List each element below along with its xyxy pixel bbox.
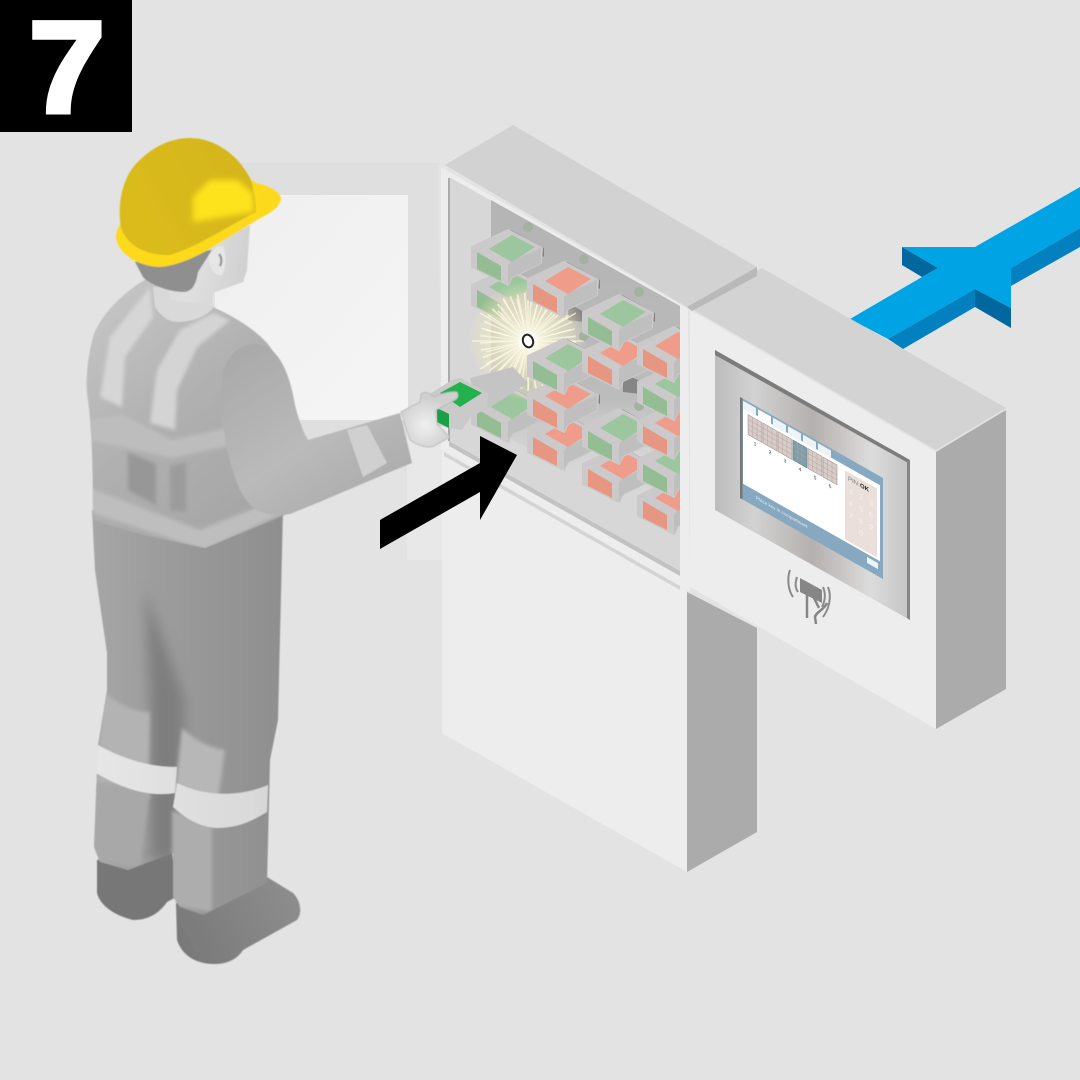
touchscreen display: PIN: xyxy=(848,475,860,489)
key modules xyxy=(471,222,680,535)
ear xyxy=(209,246,226,275)
touchscreen bezel xyxy=(715,350,910,620)
touchscreen display: 1 xyxy=(754,441,756,448)
worker xyxy=(85,138,458,964)
touchscreen display: 5 xyxy=(814,475,816,482)
touchscreen display: 2 xyxy=(769,449,771,457)
cabinet interior xyxy=(449,177,680,571)
helmet brim xyxy=(116,180,281,267)
right control cabinet xyxy=(690,268,1006,729)
sleeve reflective band xyxy=(347,425,387,477)
left locker cabinet xyxy=(441,125,757,592)
lower cabinet pedestal xyxy=(442,450,757,872)
hair xyxy=(135,250,212,292)
light burst xyxy=(472,284,584,397)
pulled out green key xyxy=(428,367,528,430)
helmet xyxy=(116,138,281,267)
dark recesses xyxy=(568,303,640,394)
helmet highlight xyxy=(193,180,254,222)
column three modules xyxy=(583,287,655,502)
touchscreen display: 3 xyxy=(784,458,786,465)
face xyxy=(170,225,250,305)
blue pipe xyxy=(850,187,1080,349)
open cabinet door xyxy=(215,163,442,560)
touchscreen display: 4 xyxy=(849,498,853,509)
step number badge xyxy=(0,0,132,140)
touchscreen display: 3 xyxy=(869,498,873,508)
left lower leg light xyxy=(98,696,152,783)
touchscreen display: OK xyxy=(860,482,869,494)
touchscreen display: Place key in compartment xyxy=(756,495,808,530)
knee band left xyxy=(96,745,177,794)
touchscreen display: 9 xyxy=(869,522,873,532)
cabinet top xyxy=(445,125,757,307)
touchscreen display: 5 xyxy=(859,504,863,514)
column one modules xyxy=(472,222,544,442)
touchscreen display: 1 xyxy=(849,486,853,497)
touchscreen display: 6 xyxy=(869,510,873,520)
cabinet frame xyxy=(441,167,690,592)
leg shading crease xyxy=(145,590,185,860)
touchscreen display xyxy=(740,397,883,579)
helmet dome xyxy=(120,138,256,255)
column two modules xyxy=(528,254,600,470)
touchscreen display: 0 xyxy=(859,528,863,538)
knee band right xyxy=(173,783,268,828)
touchscreen display: 8 xyxy=(859,516,863,526)
indicator ring xyxy=(521,333,535,349)
touchscreen display: 6 xyxy=(829,483,831,491)
right lower leg light xyxy=(175,728,225,800)
trousers xyxy=(85,505,290,920)
boots xyxy=(97,850,300,964)
torso xyxy=(87,277,297,548)
touchscreen display: 7 xyxy=(849,510,853,521)
touchscreen display: 2 xyxy=(859,492,863,502)
icon: contactless card reader xyxy=(788,570,830,624)
neck xyxy=(153,285,213,322)
touchscreen display: 4 xyxy=(799,466,801,474)
right arm xyxy=(222,344,412,515)
hand xyxy=(401,392,458,447)
arrow pointing to key slot xyxy=(380,436,517,549)
vest details xyxy=(90,287,285,550)
column four modules xyxy=(637,326,680,535)
